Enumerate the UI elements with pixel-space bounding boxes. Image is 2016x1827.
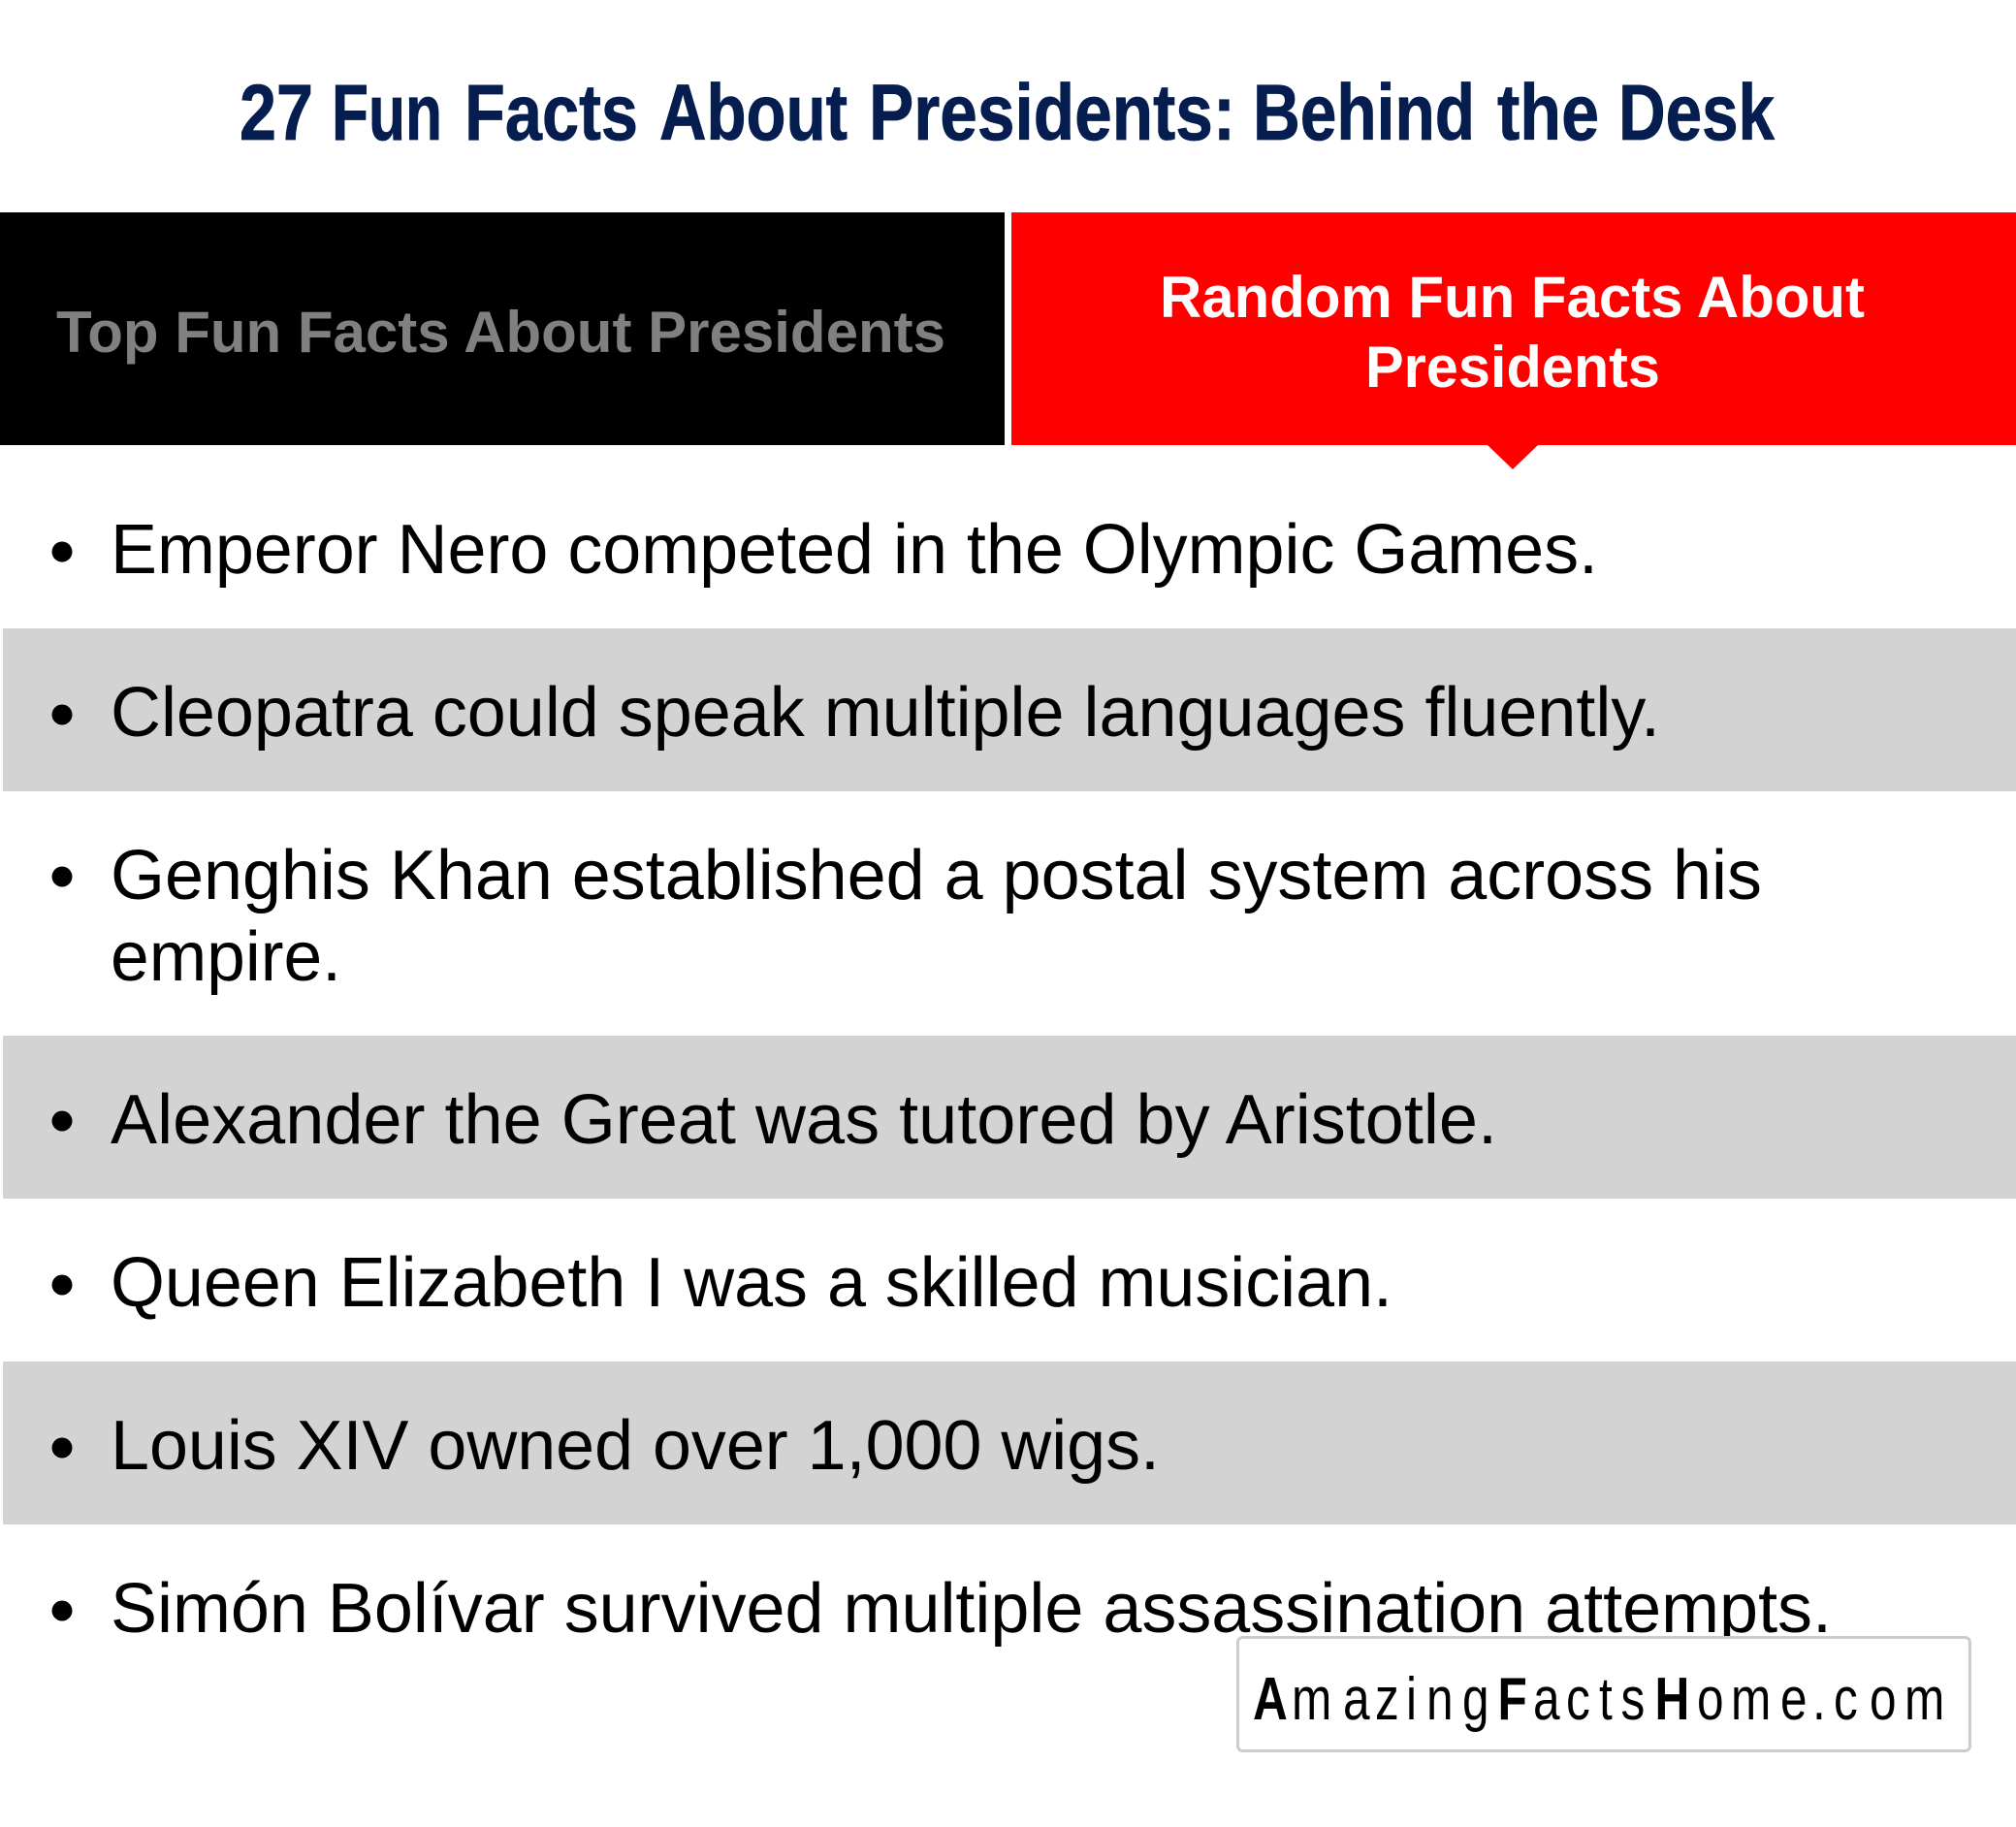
list item: Cleopatra: Cleopatra could speak multiple languages fluently. xyxy=(111,674,1660,752)
title: Behind xyxy=(1253,69,1475,157)
title: Facts xyxy=(464,69,638,157)
list item: Alexander: Alexander the Great was tutored by Aristotle. xyxy=(111,1081,1497,1159)
list item: Genghis Khan: Genghis Khan established a postal system across his xyxy=(111,837,1762,914)
tab: top fun facts (inactive): Top Fun Facts About Presidents xyxy=(56,300,945,365)
title: About xyxy=(659,69,848,157)
watermark badge xyxy=(1237,1637,1970,1751)
list item: Cleopatra xyxy=(3,628,2016,791)
title: Fun xyxy=(332,69,442,157)
tab: random fun facts (active) xyxy=(1011,212,2016,469)
list item: Nero: Emperor Nero competed in the Olympic Games. xyxy=(111,511,1598,589)
title: Presidents: xyxy=(869,69,1235,157)
tab: random fun facts (active): Random Fun Facts About xyxy=(1160,265,1865,330)
list item: Louis XIV xyxy=(3,1362,2016,1524)
title: 27 xyxy=(240,69,313,157)
title: Desk xyxy=(1618,69,1775,157)
list item: Louis XIV: Louis XIV owned over 1,000 wigs. xyxy=(111,1407,1160,1485)
watermark badge: AmazingFactsHome.com xyxy=(1253,1665,1944,1732)
list item: Alexander xyxy=(3,1036,2016,1199)
list item: Genghis Khan: empire. xyxy=(111,918,341,996)
title xyxy=(240,69,1775,157)
tab: random fun facts (active): Presidents xyxy=(1365,335,1660,400)
tab: top fun facts (inactive) xyxy=(0,212,1005,445)
title: the xyxy=(1497,69,1599,157)
list item: Elizabeth: Queen Elizabeth I was a skilled musician. xyxy=(111,1244,1392,1322)
list item: Bolívar: Simón Bolívar survived multiple assassination attempts. xyxy=(111,1570,1832,1648)
list item: Genghis Khan xyxy=(52,837,1762,996)
